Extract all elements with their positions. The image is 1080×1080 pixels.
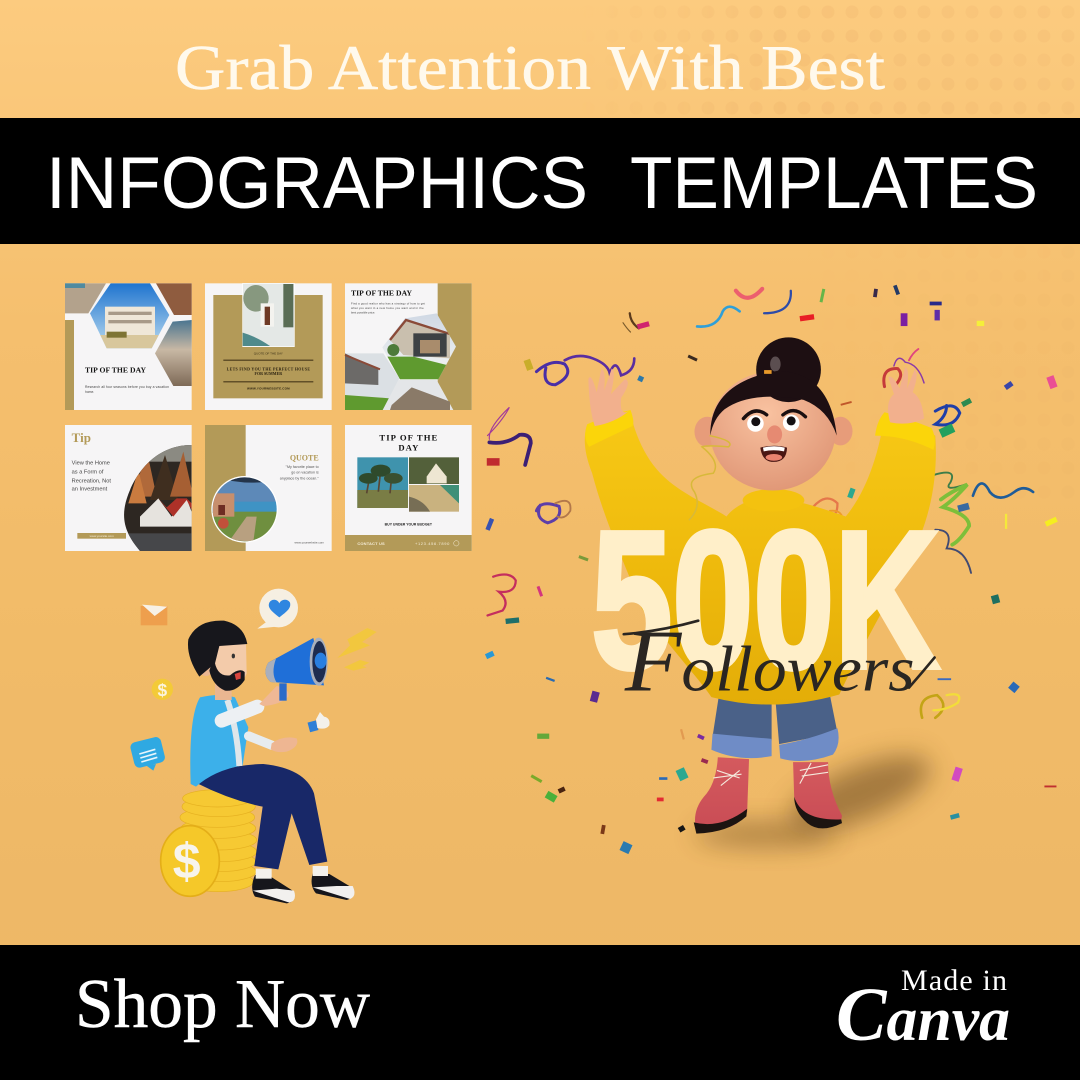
man figure bbox=[188, 621, 354, 903]
icon: dollar coin: $ bbox=[158, 680, 168, 700]
ears bbox=[694, 417, 853, 447]
thumbnail 5: quote card with circle photo: "My favorite place to bbox=[286, 465, 319, 469]
thumbnail 6: tip of the day with three photos bbox=[345, 425, 472, 551]
character bbox=[585, 337, 936, 834]
thumbnail 5: quote card with circle photo: go on vacation is bbox=[291, 471, 319, 475]
confetti bbox=[485, 285, 1058, 854]
banner: infographics templates bbox=[0, 118, 1080, 244]
thumbnail 1: tip of the day with hexagons: Research all four seasons before you buy a vacation bbox=[85, 385, 169, 389]
sweater bbox=[585, 410, 936, 705]
back arm bbox=[249, 736, 297, 752]
trousers bbox=[197, 764, 327, 869]
shorts bbox=[711, 695, 839, 761]
boots bbox=[694, 757, 842, 834]
hands bbox=[588, 367, 924, 426]
thumbnail 1: tip of the day with hexagons: TIP OF THE DAY bbox=[85, 366, 146, 375]
footer band bbox=[0, 945, 1080, 1080]
big dollar coin: $ bbox=[173, 833, 201, 889]
thumbnail 6: tip of the day with three photos: CONTACT US bbox=[357, 541, 385, 546]
head bbox=[188, 621, 247, 700]
thumbnail 2: quote card: QUOTE OF THE DAY bbox=[254, 352, 283, 356]
thumbnail 6: tip of the day with three photos: BUY UNDER YOUR BUDGET bbox=[385, 522, 433, 526]
shirt bbox=[190, 695, 248, 787]
icon: heart speech bubble bbox=[257, 589, 298, 629]
thumbnail 1: tip of the day with hexagons: home. bbox=[85, 390, 94, 394]
thumbnail 3: tip of the day with house: what you want in a new home you want and in the bbox=[351, 306, 424, 310]
face bbox=[710, 372, 836, 491]
made in canva badge: Canva bbox=[836, 973, 1010, 1057]
thumbnail 3: tip of the day with house bbox=[345, 283, 472, 410]
coin stack bbox=[180, 790, 257, 892]
illustration: 500K followers character with confetti bbox=[485, 285, 1058, 854]
thumbnail 5: quote card with circle photo bbox=[205, 425, 332, 551]
title line: Grab Attention With Best bbox=[175, 33, 886, 103]
made in canva badge: Made in bbox=[901, 964, 1007, 997]
nose and mouth bbox=[760, 425, 787, 462]
thumbnail 4: tip card with forest: Recreation, Not bbox=[72, 478, 111, 484]
shoes bbox=[252, 866, 354, 903]
thumbnail 3: tip of the day with house: TIP OF THE DAY bbox=[351, 288, 412, 297]
illustration: man with megaphone on coins bbox=[129, 589, 377, 903]
thumbnail 4: tip card with forest: www.yoursite.com bbox=[90, 534, 114, 538]
thumbnail 6: tip of the day with three photos: DAY bbox=[398, 443, 419, 453]
thumbnail 3: tip of the day with house: Find a good realtor who has a strategy of how to get bbox=[351, 302, 425, 306]
shop now label: Shop Now bbox=[75, 966, 370, 1043]
thumbnail 2: quote card: LETS FIND YOU THE PERFECT HOUSE bbox=[227, 366, 310, 371]
thumbnail 2: quote card: WWW.YOURWEBSITE.COM bbox=[247, 387, 290, 391]
thumbnail 5: quote card with circle photo: QUOTE bbox=[290, 454, 319, 463]
thumbnail 4: tip card with forest: as a Form of bbox=[72, 469, 104, 475]
thumbnail 4: tip card with forest: View the Home bbox=[72, 461, 110, 467]
banner: infographics templates: INFOGRAPHICS bbox=[46, 143, 588, 224]
thumbnail 3: tip of the day with house: best possible price. bbox=[351, 311, 375, 315]
thumbnail 2: quote card: FOR SUMMER bbox=[255, 371, 282, 376]
thumbnail 6: tip of the day with three photos: TIP OF THE bbox=[379, 433, 438, 443]
hair and bun bbox=[710, 337, 837, 436]
icon: thumbs up bbox=[308, 712, 330, 732]
thumbnail 2: quote card bbox=[205, 283, 332, 410]
template thumbnails grid bbox=[65, 283, 472, 553]
icon: chat bubble bbox=[129, 736, 166, 771]
thumbnail 6: tip of the day with three photos: +123.456.7890 bbox=[415, 541, 450, 546]
script word Followers: Followers bbox=[624, 613, 915, 711]
eyes and brows bbox=[743, 411, 805, 432]
thumbnail 1: tip of the day with hexagons bbox=[65, 283, 192, 410]
front arm bbox=[222, 686, 289, 721]
thumbnail 4: tip card with forest: Tip bbox=[72, 430, 91, 445]
big number 500K: 500K bbox=[591, 491, 939, 709]
thumbnail 5: quote card with circle photo: www.yourwebsite.com bbox=[294, 540, 325, 544]
thumbnail 4: tip card with forest: an Investment bbox=[72, 487, 108, 493]
megaphone bbox=[265, 638, 328, 701]
banner: infographics templates: TEMPLATES bbox=[630, 143, 1038, 224]
thumbnail 5: quote card with circle photo: anyplace by the ocean." bbox=[280, 477, 319, 481]
icon: dollar coin bbox=[152, 679, 173, 700]
big dollar coin bbox=[161, 826, 219, 896]
icon: lightning bolts bbox=[337, 628, 377, 671]
thumbnail 4: tip card with forest bbox=[65, 425, 193, 553]
gold streamer over face bbox=[689, 436, 730, 520]
ground shadow bbox=[694, 740, 940, 846]
background bbox=[0, 0, 1080, 118]
icon: envelope bbox=[141, 605, 167, 625]
